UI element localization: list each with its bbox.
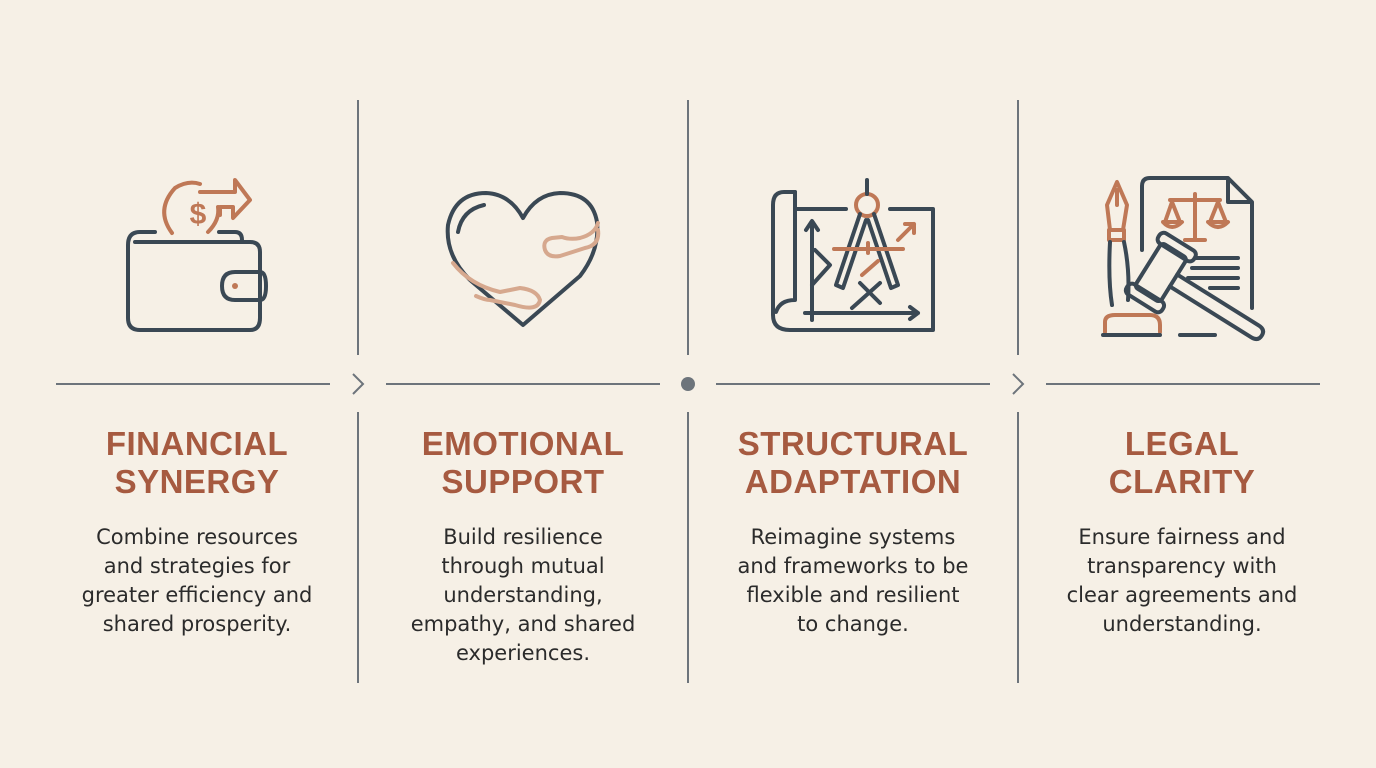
heading: financial synergy: FINANCIAL (106, 425, 288, 462)
text: structural: to change. (797, 612, 909, 636)
text: emotional: Build resilience (443, 525, 603, 549)
text: emotional: empathy, and shared (411, 612, 635, 636)
text: legal: understanding. (1102, 612, 1262, 636)
text: legal: transparency with (1087, 554, 1277, 578)
icon: legal documents and gavel (1103, 178, 1281, 366)
text: financial: and strategies for (104, 554, 291, 578)
text: structural: and frameworks to be (738, 554, 968, 578)
text: legal: Ensure fairness and (1078, 525, 1286, 549)
text: emotional: experiences. (456, 641, 590, 665)
heading: financial synergy: SYNERGY (115, 463, 279, 500)
icon: wallet: $ (190, 198, 207, 231)
heading: emotional support: EMOTIONAL (422, 425, 624, 462)
icon: blueprint with compass (773, 180, 933, 330)
text: emotional: through mutual (441, 554, 605, 578)
arrow: chevron 1 (353, 374, 363, 394)
arrow: chevron 2 (1013, 374, 1023, 394)
heading: structural adaptation: ADAPTATION (745, 463, 961, 500)
marker: dot (681, 377, 695, 391)
text: legal: clear agreements and (1067, 583, 1297, 607)
heading: legal clarity: CLARITY (1109, 463, 1255, 500)
text: financial: shared prosperity. (103, 612, 291, 636)
icon: wallet (128, 180, 266, 330)
text: structural: Reimagine systems (751, 525, 955, 549)
heading: legal clarity: LEGAL (1125, 425, 1239, 462)
text: financial: Combine resources (96, 525, 298, 549)
icon: heart with hug (448, 193, 598, 325)
heading: structural adaptation: STRUCTURAL (738, 425, 968, 462)
text: financial: greater efficiency and (82, 583, 312, 607)
text: emotional: understanding, (443, 583, 603, 607)
text: structural: flexible and resilient (747, 583, 959, 607)
heading: emotional support: SUPPORT (441, 463, 605, 500)
